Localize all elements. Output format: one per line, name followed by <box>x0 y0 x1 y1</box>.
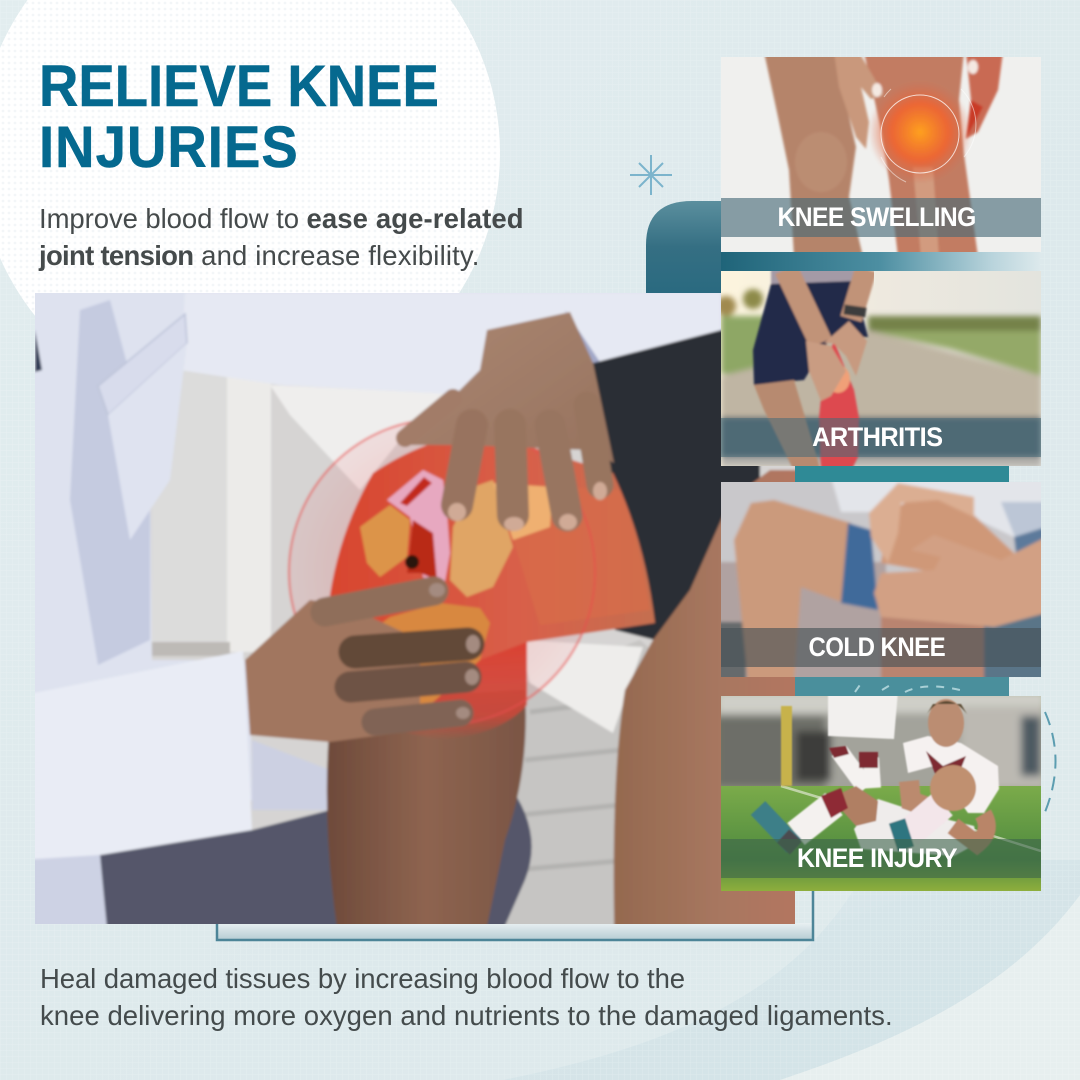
subtitle: Improve blood flow to ease age-related <box>39 203 524 234</box>
glow disc <box>289 419 595 725</box>
hand: top of knee <box>405 312 614 531</box>
title: INJURIES <box>39 115 299 180</box>
thigh and knee <box>330 433 655 660</box>
hand: around knee <box>245 583 480 742</box>
panel: arthritis <box>721 271 1041 466</box>
bottom text <box>40 963 893 1031</box>
lower leg <box>327 690 526 960</box>
label: arthritis <box>721 418 1041 457</box>
panel: knee swelling <box>721 57 1041 252</box>
label: arthritis: ARTHRITIS <box>812 422 942 452</box>
ring <box>289 419 595 725</box>
shorts <box>593 320 760 640</box>
trousers <box>100 810 345 960</box>
photo: hands on cold knee <box>721 482 1041 677</box>
label: knee injury: KNEE INJURY <box>797 843 957 873</box>
photo: football player <box>721 696 1041 891</box>
main photo: doctor examining knee <box>35 293 795 924</box>
icon: sparkle <box>630 155 672 195</box>
panel: knee injury <box>721 696 1041 891</box>
subtitle <box>38 203 524 271</box>
title: RELIEVE KNEE <box>39 54 439 119</box>
right leg <box>614 470 830 960</box>
photo: swollen knee <box>763 57 1004 252</box>
label: knee injury <box>721 839 1041 878</box>
label: knee swelling: KNEE SWELLING <box>778 202 976 232</box>
bottom text: knee delivering more oxygen and nutrients to the damaged ligaments. <box>40 1000 893 1031</box>
subtitle: joint tension and increase flexibility. <box>39 240 480 271</box>
coat <box>0 250 760 960</box>
panel: cold knee <box>721 482 1041 677</box>
label: cold knee <box>721 628 1041 667</box>
label: knee swelling <box>721 198 1041 237</box>
joint anatomy <box>387 470 450 593</box>
photo: runner holding knee <box>721 271 1041 466</box>
bench and wall blocks <box>152 370 230 652</box>
sleeve under shorts <box>565 310 600 370</box>
cuff <box>0 651 252 870</box>
bottom text: Heal damaged tissues by increasing blood flow to the <box>40 963 685 994</box>
label: cold knee: COLD KNEE <box>809 632 945 662</box>
title <box>39 54 439 180</box>
